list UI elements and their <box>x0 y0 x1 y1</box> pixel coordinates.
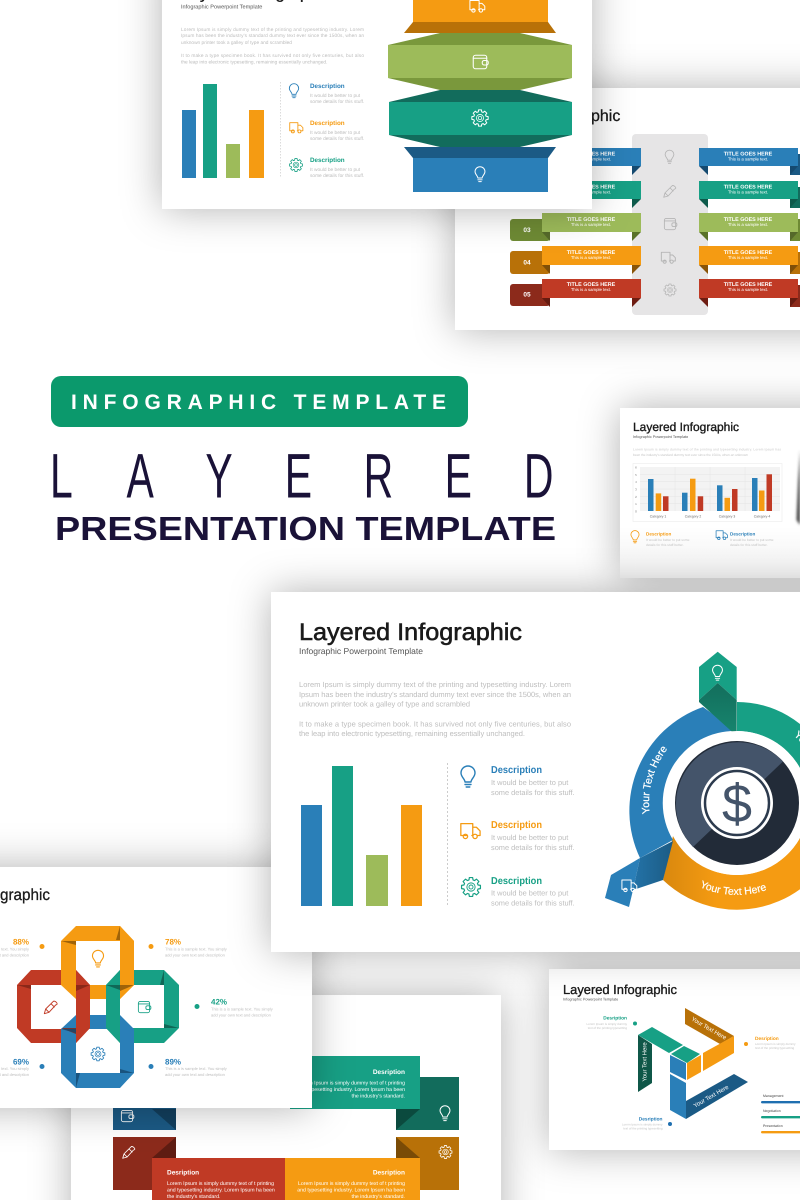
text: red ribbon <box>167 1170 275 1200</box>
bar chart <box>301 763 448 906</box>
right ribbons: TITLE GOES HERE <box>724 152 773 158</box>
bar chart <box>182 82 280 178</box>
intro text: been the industry's standard dummy text ever since the 1500s, when an unknown <box>633 453 748 457</box>
left ribbons: TITLE GOES HERE <box>567 250 616 256</box>
text: orange ribbon <box>297 1170 405 1200</box>
left ribbons: This is a sample text. <box>571 287 611 292</box>
slide heading fragment: phic <box>591 108 620 125</box>
text: teal ribbon: and typesetting industry. Lorem Ipsum ha been <box>297 1087 405 1093</box>
body paragraphs: It to make a type specimen book. It has survived not only five centuries, but also <box>181 53 364 59</box>
text: teal ribbon: the industry's standard. <box>352 1094 405 1100</box>
center icon column <box>632 134 708 315</box>
column chart: 5 <box>635 473 637 477</box>
ribbon blocks <box>113 1056 459 1200</box>
stat 42% <box>194 998 273 1018</box>
left ribbons: This is a sample text. <box>571 156 611 162</box>
column chart: Category 3 <box>719 514 735 518</box>
column chart: Category 4 <box>754 514 770 518</box>
left ribbons: TITLE GOES HERE <box>567 152 616 158</box>
column chart: 3 <box>635 488 637 492</box>
isometric triangle <box>638 1008 748 1119</box>
progress bars: Presentation <box>763 1124 783 1128</box>
left ribbons: This is a sample text. <box>571 255 611 260</box>
column chart: Category 1 <box>650 514 666 518</box>
ring icons <box>44 950 151 1061</box>
column chart: 6 <box>635 466 637 470</box>
description list: It would be better to put <box>310 93 361 99</box>
description: gear <box>462 876 575 908</box>
column chart: Category 2 <box>685 514 701 518</box>
progress bars <box>761 1094 800 1133</box>
left ribbons: TITLE GOES HERE <box>567 217 616 223</box>
description: truck: It would be better to put <box>491 833 568 842</box>
description: bulb: Description <box>491 765 542 776</box>
label: orange description: Desription <box>755 1036 779 1042</box>
right ribbons: This is a sample text. <box>728 255 768 260</box>
text: orange ribbon: Desription <box>373 1170 405 1176</box>
title banner: INFOGRAPHIC TEMPLATE <box>71 391 446 414</box>
left ribbons: This is a sample text. <box>571 222 611 227</box>
stat 78%: 78% <box>165 938 181 946</box>
slide subtitle: Infographic Powerpoint Template <box>633 435 688 439</box>
text: red ribbon: and typesetting industry. Lorem Ipsum ha been <box>167 1188 275 1194</box>
stat 78%: This is a is sample text. You simply <box>165 946 227 952</box>
right ribbons: TITLE GOES HERE <box>724 184 773 190</box>
page curl shadow <box>796 450 800 525</box>
body paragraphs <box>181 27 364 66</box>
chart descriptions: details for this stuff better. <box>646 543 684 547</box>
text: teal ribbon: Lorem Ipsum is simply dummy text of t printing <box>298 1080 405 1086</box>
right ribbons: TITLE GOES HERE <box>724 250 773 256</box>
stat 89% <box>148 1058 227 1077</box>
description list <box>289 83 364 179</box>
body paragraphs: unknown printer took a galley of type and scrambled <box>299 700 470 708</box>
right ribbons: This is a sample text. <box>728 222 768 227</box>
left ribbons: TITLE GOES HERE <box>567 184 616 190</box>
stat 42%: This is a is sample text. You simply <box>211 1006 273 1012</box>
description list: Description <box>310 157 345 164</box>
intro text <box>633 448 781 457</box>
arc labels: Your Text Here <box>642 746 667 814</box>
body paragraphs: the leap into electronic typesetting, remaining essentially unchanged. <box>181 60 327 66</box>
panel: ribbon list slide <box>455 88 800 330</box>
label: blue description: Desription <box>639 1116 663 1122</box>
slide title: Layered Infographic <box>563 982 677 997</box>
blue flag <box>605 841 673 907</box>
left ribbons: 03 <box>523 227 531 234</box>
label: blue description: Lorem Ipsum is simply dummy <box>622 1122 663 1126</box>
layered stack <box>388 0 572 192</box>
stat 89%: 89% <box>165 1058 181 1066</box>
text: red ribbon: Desription <box>167 1170 199 1176</box>
chart descriptions: It would be better to put some <box>646 538 690 542</box>
title banner <box>51 376 468 427</box>
text: red ribbon: the industry's standard. <box>167 1194 220 1200</box>
right ribbons: This is a sample text. <box>728 287 768 292</box>
stat 88% <box>0 938 44 958</box>
chart descriptions: details for this stuff better. <box>730 543 768 547</box>
isometric triangle: Your Text Here <box>690 1016 728 1042</box>
slide heading fragment: graphic <box>0 887 50 904</box>
panel: isometric slide <box>549 969 800 1150</box>
label: orange description: Lorem Ipsum is simply dummy <box>755 1042 796 1046</box>
description: gear: It would be better to put <box>491 888 568 898</box>
description: truck: some details for this stuff. <box>491 843 575 852</box>
panel: main circular slide <box>248 568 800 976</box>
main subtitle: PRESENTATION TEMPLATE <box>55 511 556 548</box>
text: teal ribbon: Desription <box>373 1069 405 1076</box>
label: teal description: Desription <box>603 1016 627 1022</box>
description: truck <box>461 820 575 852</box>
chart descriptions: Description <box>646 532 671 536</box>
slide subtitle: Infographic Powerpoint Template <box>299 646 423 656</box>
description: bulb <box>461 765 575 797</box>
left ribbons <box>510 148 641 307</box>
stat 78%: add your own text and description <box>165 952 225 958</box>
teal arc <box>737 702 800 854</box>
stat 89%: add your own text and description <box>165 1072 225 1077</box>
label: orange description <box>744 1036 796 1050</box>
label: blue description <box>622 1116 672 1130</box>
center disc <box>665 731 800 875</box>
description list: some details for this stuff. <box>310 173 364 179</box>
stat 42%: add your own text and description <box>211 1012 271 1018</box>
description list: It would be better to put <box>310 130 361 136</box>
right ribbons: TITLE GOES HERE <box>724 217 773 223</box>
progress bars: Negotiation <box>763 1109 781 1113</box>
description: bulb: It would be better to put <box>491 778 568 787</box>
description: gear: Description <box>491 876 542 887</box>
chart descriptions: Description <box>730 532 755 536</box>
panel: column chart slide <box>620 408 800 578</box>
arc labels: Your Text Here <box>702 880 766 895</box>
panel: interlocked rings slide <box>0 867 312 1108</box>
chart descriptions <box>631 531 774 547</box>
text: red ribbon: Lorem Ipsum is simply dummy text of t printing <box>167 1181 274 1187</box>
left ribbons: 04 <box>523 260 531 266</box>
body paragraphs: Lorem Ipsum is simply dummy text of the printing and typesetting industry. Lorem <box>181 27 364 33</box>
body paragraphs: Ipsum has been the industry's standard dummy text ever since the 1500s, when an <box>181 33 364 39</box>
right ribbons <box>699 148 800 307</box>
isometric triangle: Your Text Here <box>692 1083 731 1110</box>
description: truck: Description <box>491 820 542 831</box>
text: orange ribbon: Lorem Ipsum is simply dummy text of t printing <box>298 1181 405 1187</box>
column icons <box>661 150 677 296</box>
text: teal ribbon <box>297 1069 405 1100</box>
label: teal description <box>586 1016 637 1030</box>
intro text: Lorem Ipsum is simply dummy text of the printing and typesetting industry. Lorem Ipsum has <box>633 448 781 452</box>
stat 42%: 42% <box>211 998 227 1006</box>
label: teal description: text of the printing typesetting <box>588 1026 627 1030</box>
panel: ribbon frame slide <box>71 995 501 1200</box>
body paragraphs: the leap into electronic typesetting, remaining essentially unchanged. <box>299 729 525 738</box>
left ribbons: This is a sample text. <box>571 190 611 194</box>
teal flag <box>699 652 737 736</box>
slide title: Layered Infographic <box>299 619 522 646</box>
chart descriptions: It would be better to put some <box>730 538 774 542</box>
column chart <box>633 464 782 522</box>
orange arc <box>663 803 800 910</box>
isometric triangle: Your Text Here <box>642 1042 648 1082</box>
description list: Description <box>310 83 345 90</box>
slide subtitle: Infographic Powerpoint Template <box>563 998 618 1002</box>
body paragraphs: It to make a type specimen book. It has survived not only five centuries, but also <box>299 720 571 728</box>
description list: Description <box>310 120 345 127</box>
column chart: 2 <box>635 495 637 499</box>
main title: LAYERED: LAYERED <box>50 442 553 512</box>
column chart: 0 <box>635 510 637 514</box>
description list: some details for this stuff. <box>310 99 364 105</box>
slide title: Layered Infographic <box>633 420 739 434</box>
description list: It would be better to put <box>310 167 361 173</box>
body paragraphs: Ipsum has been the industry's standard dummy text ever since the 1500s, when an <box>299 690 571 699</box>
description list: some details for this stuff. <box>310 136 364 142</box>
body paragraphs: unknown printer took a galley of type and scrambled <box>181 40 292 46</box>
body paragraphs: Lorem Ipsum is simply dummy text of the printing and typesetting industry. Lorem <box>299 680 571 689</box>
body paragraphs <box>299 680 571 738</box>
panel: layered stack slide <box>162 0 592 209</box>
interlocked rings <box>17 926 179 1088</box>
right ribbons: This is a sample text. <box>728 190 768 194</box>
description: bulb: some details for this stuff. <box>491 788 575 797</box>
stat 69% <box>0 1058 44 1077</box>
stat 88%: 88% <box>13 938 29 946</box>
arc labels <box>642 730 800 895</box>
label: orange description: text of the printing typesetting <box>755 1046 795 1050</box>
column chart: 1 <box>635 502 637 506</box>
right ribbons: TITLE GOES HERE <box>724 282 773 288</box>
label: teal description: Lorem Ipsum is simply dummy <box>586 1022 627 1026</box>
circular diagram <box>605 652 800 910</box>
slide subtitle: Infographic Powerpoint Template <box>181 4 262 10</box>
stat 78% <box>148 938 227 958</box>
column chart: 4 <box>635 480 637 484</box>
stat 89%: This is a is sample text. You simply <box>165 1066 227 1071</box>
right ribbons: This is a sample text. <box>728 156 768 162</box>
text: orange ribbon: the industry's standard. <box>352 1194 405 1200</box>
text: orange ribbon: and typesetting industry. Lorem Ipsum ha been <box>297 1188 405 1194</box>
left ribbons: 05 <box>523 292 531 298</box>
left ribbons: TITLE GOES HERE <box>567 282 616 288</box>
center disc: $ <box>722 774 752 834</box>
progress bars: Management <box>763 1094 783 1098</box>
description: gear: some details for this stuff. <box>491 898 575 908</box>
blue arc <box>629 707 737 858</box>
label: blue description: text of the printing typesetting <box>623 1126 663 1130</box>
stat 69%: 69% <box>13 1058 29 1066</box>
